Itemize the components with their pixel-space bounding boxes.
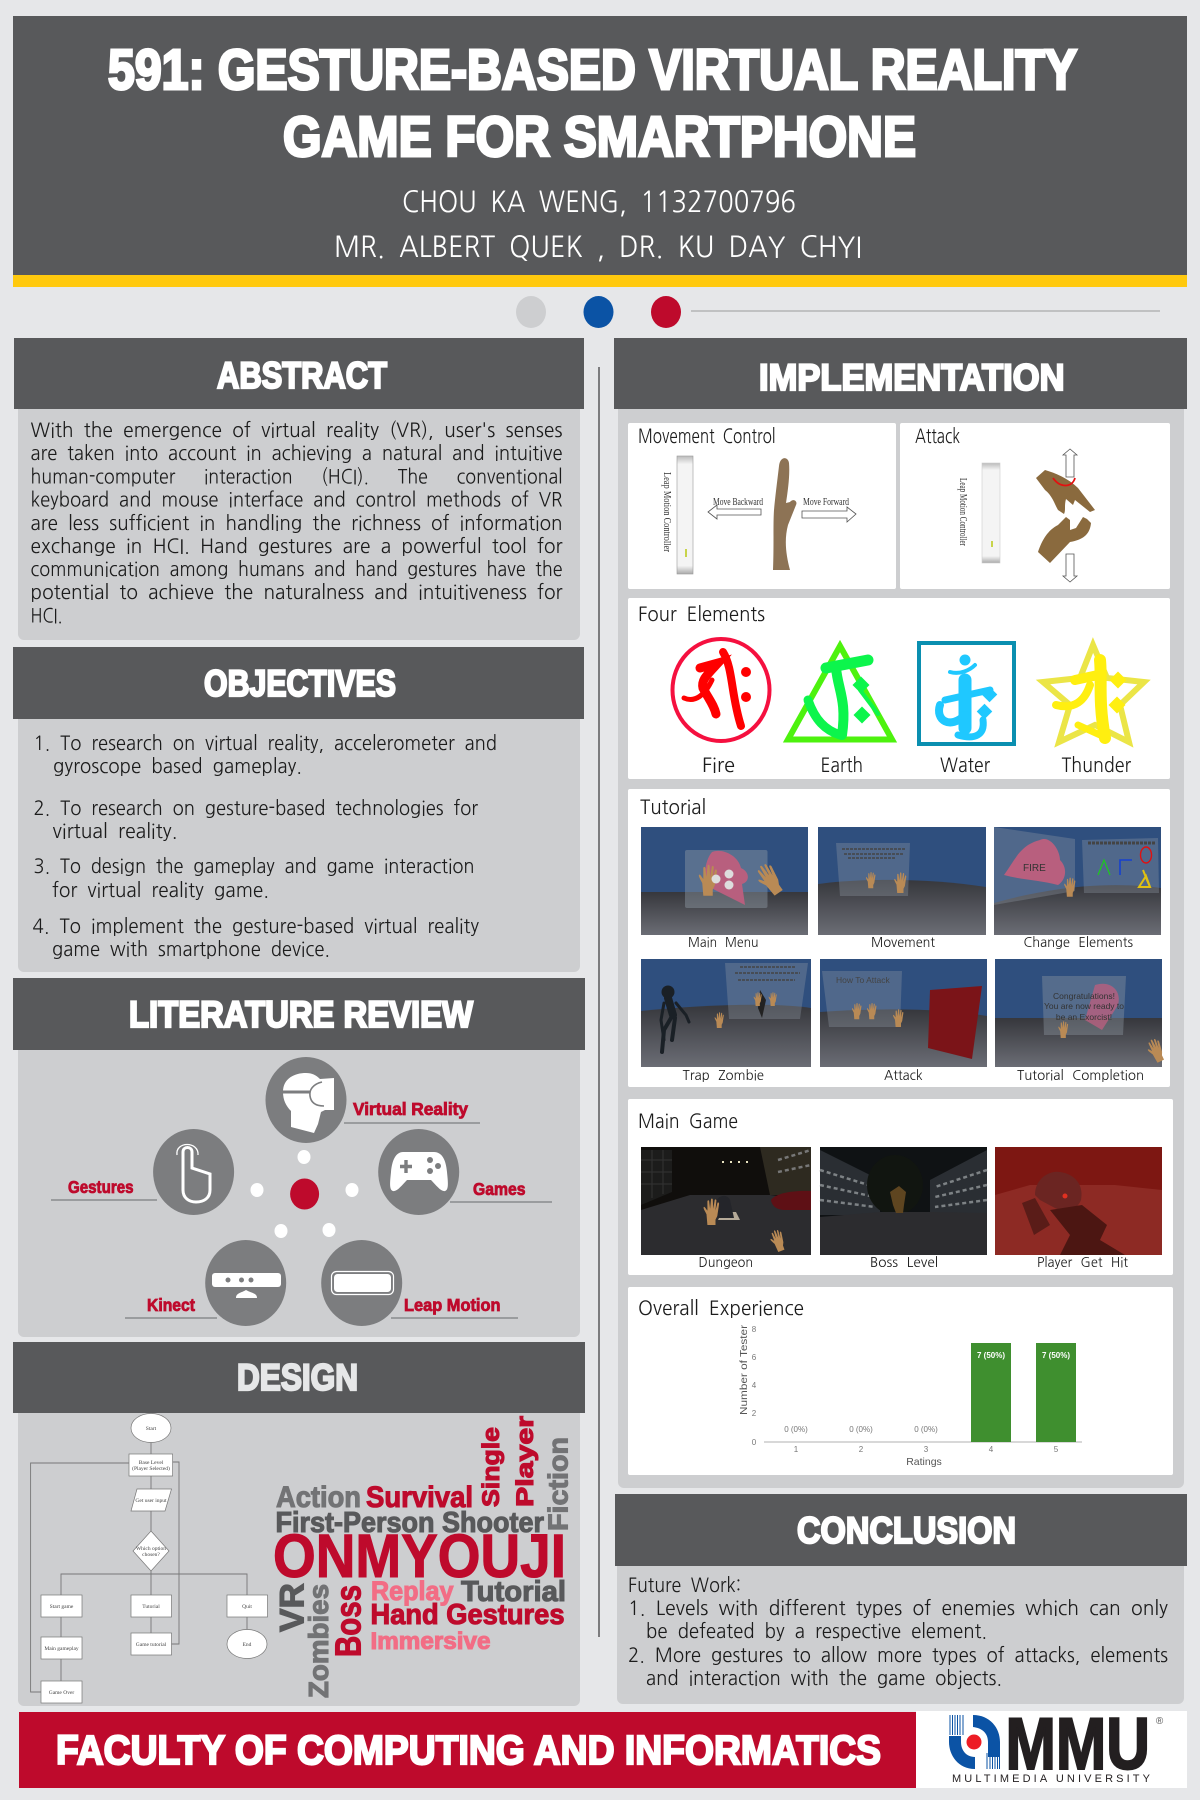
word cloud: Zombies xyxy=(303,1584,334,1698)
labels: elements: Earth xyxy=(820,755,863,775)
abstract text: communication among humans and hand gestures have the xyxy=(30,559,562,579)
bar chart: 7 (50%) xyxy=(1042,1351,1070,1360)
abstract text: keyboard and mouse interface and control methods of VR xyxy=(30,490,562,510)
label: gestures xyxy=(51,1177,157,1200)
bar chart: 6 xyxy=(752,1353,757,1362)
label: games xyxy=(450,1179,552,1202)
icon: fire xyxy=(672,639,770,741)
labels: elements xyxy=(702,755,1132,775)
arrow: move forward: Move Forward xyxy=(803,497,850,508)
flowchart: Which option xyxy=(136,1546,166,1552)
word cloud: Immersive xyxy=(370,1628,490,1655)
captions: tutorial: Trap Zombie xyxy=(682,1068,764,1082)
footer banner xyxy=(19,1712,916,1788)
screenshot: trap zombie xyxy=(641,959,811,1067)
icon: leap motion controller xyxy=(957,463,1000,563)
bar chart: 5 xyxy=(1054,1445,1059,1454)
label: leap motion: Leap Motion xyxy=(404,1295,500,1315)
student name: CHOU KA WENG, 1132700796 xyxy=(402,188,796,217)
abstract text: exchange in HCI. Hand gestures are a powerful tool for xyxy=(30,536,563,556)
word cloud: Player xyxy=(512,1416,539,1507)
MMU logo xyxy=(916,1704,1187,1788)
abstract text: human-computer interaction (HCI). The conventional xyxy=(30,466,562,486)
screenshot: boss level xyxy=(820,1147,987,1255)
word cloud: Replay xyxy=(371,1576,454,1606)
abstract text: are less sufficient in handling the richness of information xyxy=(30,513,562,533)
screenshot: attack xyxy=(820,959,987,1067)
flowchart: End xyxy=(243,1642,252,1648)
objectives list: game with smartphone device. xyxy=(52,939,330,959)
card: movement control: Movement Control xyxy=(638,426,776,446)
panel: design xyxy=(13,1342,585,1706)
word cloud: Survival xyxy=(366,1481,473,1514)
heading: objectives: OBJECTIVES xyxy=(204,663,396,704)
heading: implementation: IMPLEMENTATION xyxy=(759,357,1064,398)
conclusion text: 2. More gestures to allow more types of attacks, elements xyxy=(628,1645,1168,1665)
heading: design: DESIGN xyxy=(237,1357,358,1398)
objectives list: 2. To research on gesture-based technologies for xyxy=(34,798,479,818)
MMU logo: ® xyxy=(1156,1716,1164,1727)
flowchart: Get user input xyxy=(135,1498,167,1504)
title banner xyxy=(13,16,1187,287)
captions: main game xyxy=(698,1255,1128,1269)
screenshot: tutorial completion: Congratulations! xyxy=(1053,991,1115,1001)
bar chart: 2 xyxy=(752,1409,757,1418)
icon: leap motion controller: Leap Motion Controller xyxy=(661,472,672,552)
icon: leap motion controller xyxy=(661,456,693,574)
card: four elements xyxy=(628,598,1170,779)
word cloud: Boss xyxy=(328,1585,368,1657)
screenshot: movement xyxy=(818,827,986,935)
title line 2: GAME FOR SMARTPHONE xyxy=(283,105,916,169)
arrow: move backward: Move Backward xyxy=(713,497,764,508)
centre hub with dots xyxy=(250,1150,358,1238)
word cloud xyxy=(273,1416,574,1698)
bar chart: 4 xyxy=(752,1381,757,1390)
supervisors: MR. ALBERT QUEK , DR. KU DAY CHYI xyxy=(334,233,862,262)
objectives list: 3. To design the gameplay and game interaction xyxy=(34,856,474,876)
card: movement control xyxy=(628,423,896,589)
screenshot: attack: How To Attack xyxy=(836,975,890,985)
bar chart: 0 (0%) xyxy=(784,1425,808,1434)
abstract text: potential to achieve the naturalness and intuitiveness for xyxy=(30,582,563,602)
word cloud: Fiction xyxy=(542,1437,574,1531)
screenshot: tutorial completion: You are now ready to xyxy=(1044,1001,1124,1011)
panel: implementation xyxy=(614,338,1187,1488)
card: main game xyxy=(628,1099,1173,1275)
flowchart: Main gameplay xyxy=(44,1646,79,1652)
icon: kinect xyxy=(205,1240,286,1326)
flowchart: Quit xyxy=(242,1604,252,1610)
screenshot: dungeon xyxy=(641,1147,811,1255)
icon: game controller xyxy=(378,1129,459,1215)
card: overall experience xyxy=(628,1287,1173,1475)
bar chart: 0 (0%) xyxy=(914,1425,938,1434)
bar chart: 8 xyxy=(752,1325,757,1334)
objectives list: virtual reality. xyxy=(52,821,178,841)
screenshot: tutorial completion: be an Exorcist! xyxy=(1056,1012,1112,1022)
objectives list: for virtual reality game. xyxy=(52,880,269,900)
label: games: Games xyxy=(473,1179,526,1199)
screenshot: player get hit xyxy=(995,1147,1162,1255)
bar chart: Ratings xyxy=(906,1456,942,1468)
label: virtual reality: Virtual Reality xyxy=(353,1099,468,1119)
bar chart: 7 (50%) xyxy=(977,1351,1005,1360)
icon: gestures hand xyxy=(153,1129,234,1215)
bar chart xyxy=(738,1324,1082,1468)
captions: tutorial: Attack xyxy=(884,1068,922,1082)
heading: literature review: LITERATURE REVIEW xyxy=(129,994,473,1035)
icon: virtual reality headset xyxy=(266,1057,346,1143)
conclusion text: 1. Levels with different types of enemies which can only xyxy=(628,1598,1168,1618)
icon: water xyxy=(919,643,1014,744)
word cloud: First-Person Shooter xyxy=(276,1507,544,1539)
decorative dots xyxy=(516,296,1160,328)
card: attack: Attack xyxy=(915,426,960,446)
abstract text: are taken into account in achieving a natural and intuitive xyxy=(30,443,562,463)
flowchart: Game tutorial xyxy=(136,1642,167,1648)
flowchart: Start game xyxy=(50,1604,74,1610)
bar chart: 4 xyxy=(989,1445,994,1454)
card: overall experience: Overall Experience xyxy=(638,1298,804,1318)
captions: main game: Dungeon xyxy=(698,1255,753,1269)
labels: elements: Water xyxy=(940,755,991,775)
icon: thunder xyxy=(1043,645,1144,742)
flowchart: chosen? xyxy=(142,1552,160,1558)
word cloud: VR xyxy=(274,1583,312,1632)
screenshot: main menu xyxy=(641,827,808,935)
card: attack xyxy=(900,423,1170,589)
word cloud: Single xyxy=(478,1427,505,1507)
MMU logo: MULTIMEDIA UNIVERSITY xyxy=(952,1773,1151,1785)
label: kinect: Kinect xyxy=(147,1295,195,1315)
captions: tutorial: Main Menu xyxy=(688,935,758,949)
captions: tutorial: Tutorial Completion xyxy=(1017,1068,1144,1082)
panel: abstract xyxy=(14,338,584,640)
card: main game: Main Game xyxy=(638,1111,738,1131)
flowchart: Tutorial xyxy=(142,1604,160,1610)
bar chart: 0 (0%) xyxy=(849,1425,873,1434)
abstract text xyxy=(30,420,563,626)
abstract text: HCI. xyxy=(30,606,62,626)
arrow: move backward xyxy=(708,497,764,519)
footer text: FACULTY OF COMPUTING AND INFORMATICS xyxy=(56,1727,881,1773)
flowchart: (Player Selected) xyxy=(132,1465,170,1472)
MMU logo: MMU xyxy=(1006,1704,1150,1785)
screenshot: change elements: FIRE xyxy=(1023,863,1046,874)
captions: tutorial: Movement xyxy=(871,935,935,949)
bar chart: 3 xyxy=(924,1445,929,1454)
abstract text: With the emergence of virtual reality (VR), user's senses xyxy=(30,420,562,440)
yellow strip xyxy=(13,275,1187,287)
arrow: down xyxy=(1063,554,1077,582)
objectives list xyxy=(32,733,497,959)
heading: abstract: ABSTRACT xyxy=(217,355,387,396)
word cloud: Hand Gestures xyxy=(370,1599,564,1631)
captions: tutorial: Change Elements xyxy=(1024,935,1133,949)
screenshot: tutorial completion xyxy=(995,959,1167,1067)
objectives list: 4. To implement the gesture-based virtual reality xyxy=(32,916,479,936)
logo emblem xyxy=(949,1715,1000,1769)
labels: elements: Fire xyxy=(702,755,735,775)
card: four elements: Four Elements xyxy=(638,604,765,624)
panel: conclusion xyxy=(615,1494,1187,1704)
captions: main game: Boss Level xyxy=(870,1255,938,1269)
captions: main game: Player Get Hit xyxy=(1037,1255,1128,1269)
conclusion text: be defeated by a respective element. xyxy=(646,1621,987,1641)
arrow: move forward xyxy=(802,497,856,522)
flowchart: Base Level xyxy=(139,1460,164,1466)
bar chart: Number of Tester xyxy=(738,1324,750,1415)
label: gestures: Gestures xyxy=(68,1177,134,1197)
flowchart xyxy=(31,1414,267,1703)
labels: elements: Thunder xyxy=(1062,755,1132,775)
bar chart: 2 xyxy=(859,1445,864,1454)
card: tutorial xyxy=(628,789,1170,1087)
word cloud: Tutorial xyxy=(461,1576,566,1608)
icon: leap motion xyxy=(321,1240,402,1326)
bar chart: 0 xyxy=(752,1438,757,1447)
screenshot: change elements xyxy=(994,827,1161,935)
icon: two pinching hands xyxy=(1036,470,1095,563)
word cloud: ONMYOUJI xyxy=(273,1522,566,1590)
flowchart: Start xyxy=(146,1426,157,1432)
conclusion text: Future Work: xyxy=(628,1575,741,1595)
card: tutorial: Tutorial xyxy=(640,797,706,817)
captions: tutorial xyxy=(682,935,1144,1082)
icon: side-on hand xyxy=(773,458,796,570)
conclusion text xyxy=(628,1575,1168,1689)
bar chart: 1 xyxy=(794,1445,799,1454)
flowchart: Game Over xyxy=(49,1690,74,1696)
word cloud: Action xyxy=(276,1481,361,1514)
objectives list: 1. To research on virtual reality, accelerometer and xyxy=(34,733,497,753)
label: kinect xyxy=(125,1295,217,1318)
arrow: up xyxy=(1063,449,1077,477)
heading: conclusion: CONCLUSION xyxy=(797,1510,1016,1551)
icon: earth xyxy=(788,646,892,740)
icon: leap motion controller: Leap Motion Controller xyxy=(957,478,968,546)
objectives list: gyroscope based gameplay. xyxy=(53,756,302,776)
conclusion text: and interaction with the game objects. xyxy=(646,1668,1002,1689)
panel: literature review xyxy=(13,978,585,1337)
panel: objectives xyxy=(13,647,584,972)
